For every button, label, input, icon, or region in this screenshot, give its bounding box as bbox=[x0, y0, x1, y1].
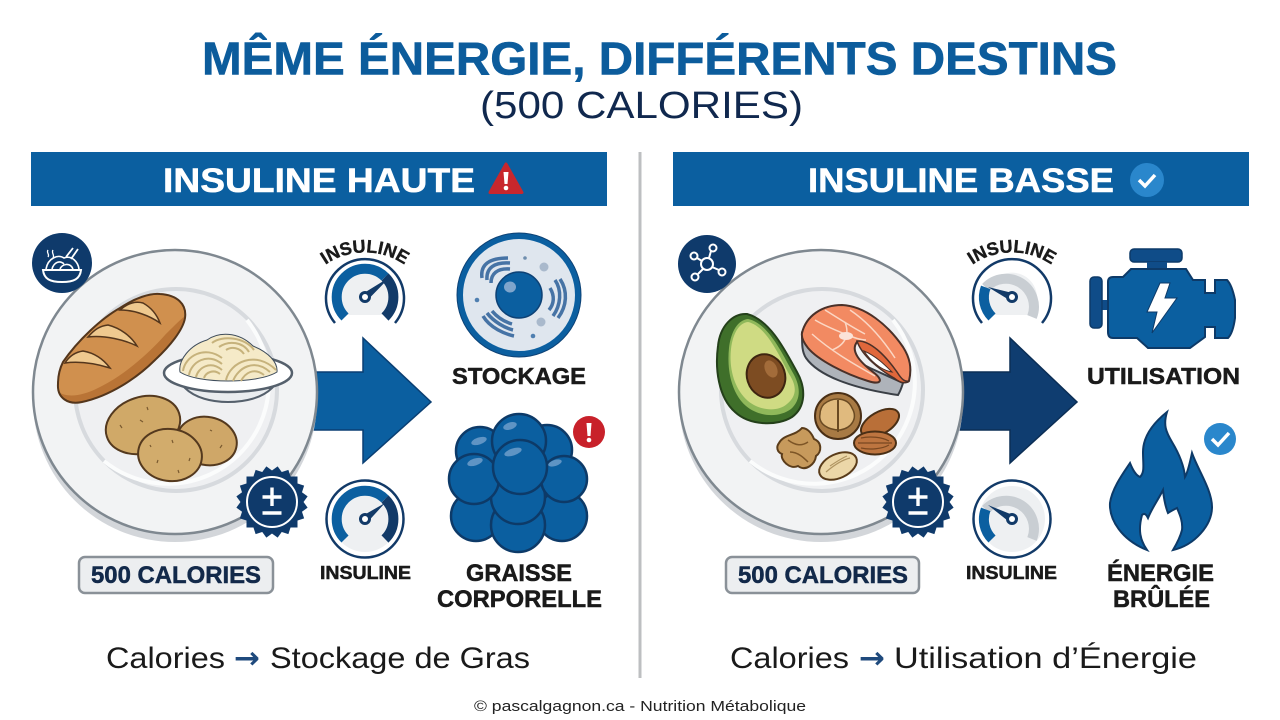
panel: insuline haute bbox=[31, 152, 607, 676]
gauge: high insulin bottom bbox=[326, 480, 404, 558]
icon: check bbox=[1204, 423, 1236, 455]
arrow: toward storage bbox=[300, 338, 431, 463]
header bar: insuline haute: INSULINE HAUTE bbox=[163, 162, 475, 200]
caption: calories to fat storage: → bbox=[234, 641, 260, 676]
food: nuts bbox=[777, 393, 904, 485]
caption: calories to energy use: Calories bbox=[730, 642, 849, 675]
header bar: insuline basse: INSULINE BASSE bbox=[808, 162, 1114, 200]
arrow: toward utilization bbox=[946, 338, 1077, 463]
icon: flame bbox=[1110, 412, 1212, 550]
gauge: low insulin bottom bbox=[974, 480, 1050, 558]
badge: 500 calories bbox=[726, 557, 919, 593]
header bar: insuline haute bbox=[31, 152, 607, 206]
plate: healthy fats and protein bbox=[679, 250, 963, 542]
food: salmon steak bbox=[802, 305, 910, 395]
label: insuline: INSULINE bbox=[966, 562, 1057, 583]
caption: calories to energy use bbox=[730, 641, 1197, 676]
caption: calories to fat storage: Calories bbox=[106, 642, 225, 675]
badge: 500 calories: 500 CALORIES bbox=[91, 562, 261, 589]
icon: plus-minus seal bbox=[236, 466, 308, 538]
icon: molecule network bbox=[678, 235, 736, 293]
food: pasta dish bbox=[164, 334, 292, 402]
gauge: low insulin top bbox=[966, 240, 1058, 324]
caption: calories to fat storage bbox=[106, 641, 530, 676]
label: énergie brûlée: ÉNERGIE bbox=[1107, 559, 1214, 587]
icon: pasta bowl bbox=[32, 233, 92, 293]
food: bread loaf bbox=[58, 294, 185, 403]
icon: cell bbox=[457, 233, 581, 357]
badge: 500 calories bbox=[79, 557, 273, 593]
icon: alert bbox=[573, 416, 605, 448]
gauge: high insulin top: INSULINE bbox=[320, 240, 410, 264]
panel: insuline basse bbox=[673, 152, 1249, 676]
label: graisse corporelle: GRAISSE bbox=[466, 560, 572, 587]
title: MÊME ÉNERGIE, DIFFÉRENTS DESTINS bbox=[202, 32, 1117, 84]
food: avocado bbox=[717, 314, 803, 423]
center divider bbox=[638, 152, 642, 678]
label: énergie brûlée bbox=[1107, 559, 1214, 613]
footer credit: © pascalgagnon.ca - Nutrition Métabolique bbox=[474, 698, 806, 715]
label: énergie brûlée: BRÛLÉE bbox=[1113, 585, 1210, 613]
gauge: low insulin top: INSULINE bbox=[966, 240, 1058, 264]
header bar: insuline basse bbox=[673, 152, 1249, 206]
label: graisse corporelle: CORPORELLE bbox=[437, 586, 602, 613]
label: stockage: STOCKAGE bbox=[452, 363, 586, 389]
icon: fat cells bbox=[449, 414, 587, 552]
gauge: high insulin top bbox=[320, 240, 410, 324]
food: potatoes bbox=[98, 387, 241, 485]
caption: calories to energy use: Utilisation d’Énergie bbox=[894, 642, 1197, 675]
plate: carbohydrate foods bbox=[33, 250, 317, 542]
label: insuline: INSULINE bbox=[320, 562, 411, 583]
icon: plus-minus seal bbox=[882, 466, 954, 538]
icon: engine bbox=[1090, 249, 1235, 348]
label: graisse corporelle bbox=[437, 560, 602, 613]
subtitle: (500 CALORIES) bbox=[480, 85, 803, 127]
caption: calories to fat storage: Stockage de Gras bbox=[270, 642, 530, 675]
label: utilisation: UTILISATION bbox=[1087, 363, 1240, 389]
badge: 500 calories: 500 CALORIES bbox=[738, 562, 908, 589]
caption: calories to energy use: → bbox=[859, 641, 885, 676]
